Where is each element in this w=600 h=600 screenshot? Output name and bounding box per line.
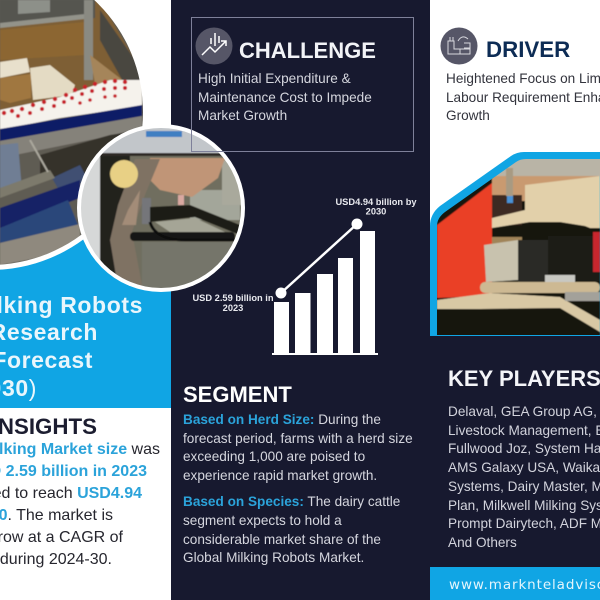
- photo: bottling line in circle: [0, 0, 143, 270]
- bar chart: market growth: 2023: [223, 303, 243, 313]
- panel: driver: [440, 28, 600, 123]
- panel: left blue title band: [0, 235, 171, 408]
- photo: milking robot on udder in circle: [77, 124, 245, 292]
- bar chart: market growth: USD 2.59 billion in: [192, 293, 274, 303]
- text: company list: Fullwood Joz, System Ha: [448, 441, 600, 456]
- panel: segment text: [183, 382, 413, 565]
- text: species: considerable market share of the: [183, 532, 381, 547]
- text: herd size: [183, 412, 413, 483]
- text: company list: And Others: [448, 535, 517, 550]
- text: challenge description: Maintenance Cost to Impede: [198, 90, 372, 105]
- text: market insights: during 2024-30.: [0, 551, 112, 568]
- text: market insights: [0, 414, 160, 568]
- text: company list: Prompt Dairytech, ADF M: [448, 516, 600, 531]
- text: challenge description: [198, 71, 372, 123]
- heading: report title: [0, 292, 143, 401]
- heading: segment: SEGMENT: [183, 382, 292, 407]
- bar chart: market growth: 2030: [366, 206, 386, 216]
- panel: challenge: [191, 17, 414, 152]
- text: company list: Delaval, GEA Group AG,: [448, 404, 597, 419]
- footer: website: [430, 567, 600, 600]
- text: company list: [448, 404, 600, 550]
- text: company list: Livestock Management, E: [448, 423, 600, 438]
- text: species: Global Milking Robots Market.: [183, 550, 364, 565]
- text: driver description: [446, 71, 600, 123]
- text: species: [183, 494, 400, 565]
- text: herd size: Based on Herd Size: During the: [183, 412, 381, 427]
- text: herd size: exceeding 1,000 are poised to: [183, 449, 365, 464]
- heading: challenge: CHALLENGE: [239, 38, 376, 63]
- text: challenge description: High Initial Expenditure &: [198, 71, 351, 86]
- text: herd size: experience rapid market growth.: [183, 468, 377, 483]
- icon: factory: [440, 28, 478, 64]
- heading: driver: DRIVER: [486, 37, 570, 62]
- text: driver description: Growth: [446, 108, 490, 123]
- panel: right lower dark section: [430, 335, 600, 567]
- panel: center dark column: [171, 0, 430, 600]
- text: company list: AMS Galaxy USA, Waika: [448, 460, 600, 475]
- panel: key players: [448, 366, 600, 550]
- text: company list: Plan, Milkwell Milking Sys: [448, 498, 600, 513]
- text: species: Based on Species: The dairy cattle: [183, 494, 400, 509]
- text: herd size: forecast period, farms with a herd size: [183, 431, 413, 446]
- icon: rising chart: [196, 28, 232, 64]
- heading: key players: KEY PLAYERS: [448, 366, 600, 391]
- bar chart: market growth: USD4.94 billion by: [335, 197, 417, 207]
- photo: robot arm and cow framed in blue: [430, 152, 600, 336]
- text: species: segment expects to hold a: [183, 513, 342, 528]
- text: company list: Systems, Dairy Master, M: [448, 479, 600, 494]
- text: challenge description: Market Growth: [198, 108, 287, 123]
